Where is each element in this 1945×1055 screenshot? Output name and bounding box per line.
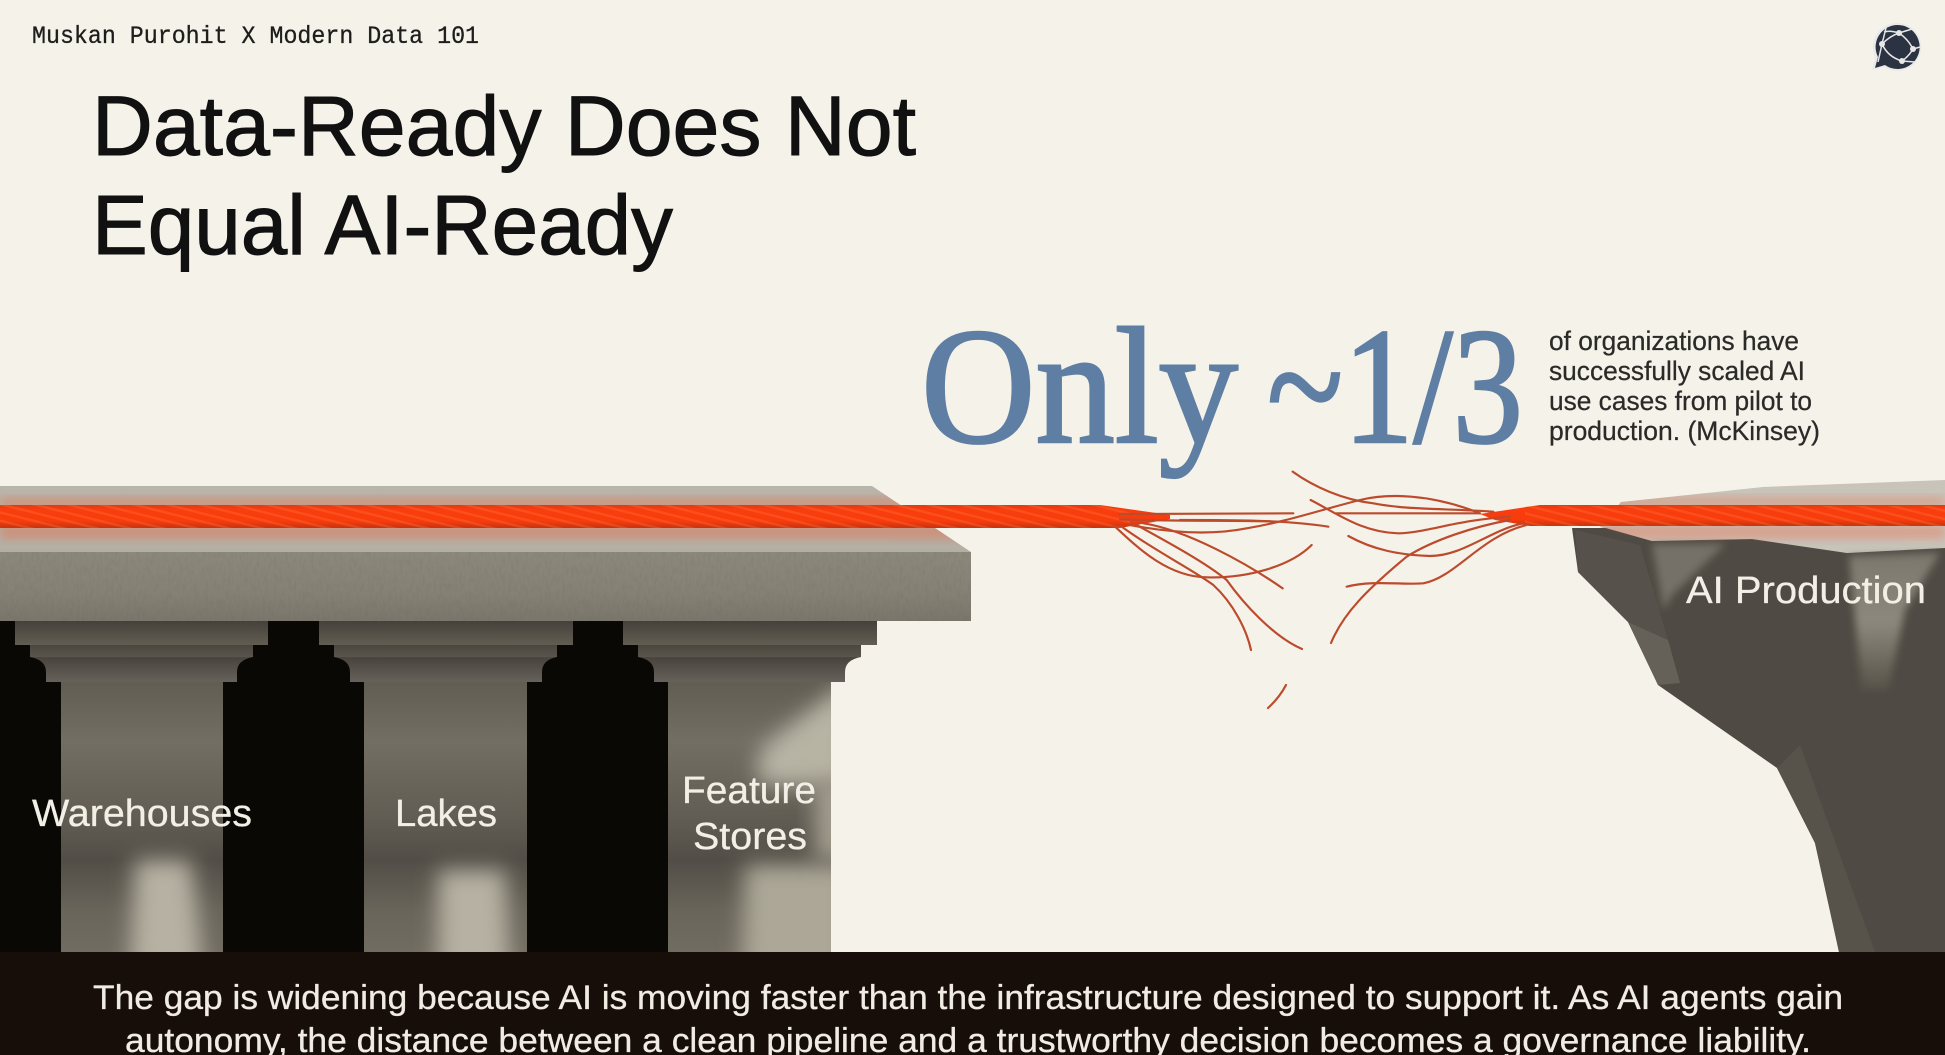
red rope right segment: [1480, 505, 1945, 526]
bottom caption band: [0, 952, 1945, 1055]
statistic description: use cases from pilot to: [1549, 386, 1812, 416]
title: [92, 79, 916, 272]
frayed rope strands: [1113, 472, 1527, 708]
pillar labels: Feature: [682, 770, 816, 812]
title: Data-Ready Does Not: [92, 79, 916, 173]
big statistic: ~1/3: [1267, 294, 1523, 478]
slab front face: [0, 552, 971, 621]
cliff body: [1572, 528, 1945, 952]
red rope left segment: [0, 505, 1170, 528]
column: warehouses: [15, 621, 268, 975]
cliff light facets: [1652, 544, 1725, 610]
pillar labels: Stores: [693, 816, 807, 858]
big statistic: [921, 294, 1523, 478]
pillar labels: Lakes: [395, 793, 497, 835]
column: lakes: [319, 621, 573, 975]
panel: pillar structure: [0, 486, 971, 980]
credit line: Muskan Purohit X Modern Data 101: [32, 22, 479, 51]
statistic description: of organizations have: [1549, 326, 1799, 356]
statistic description: production. (McKinsey): [1549, 416, 1820, 446]
statistic description: successfully scaled AI: [1549, 356, 1805, 386]
dark recess behind columns: [0, 621, 668, 952]
slab top surface: [0, 486, 971, 552]
caption text: The gap is widening because AI is moving faster than the infrastructure designed to support it. As AI agents gain: [93, 979, 1843, 1017]
title: Equal AI-Ready: [92, 178, 673, 272]
panel: cliff: [1572, 480, 1945, 952]
rope glow: [0, 498, 1945, 538]
column: feature stores: [623, 621, 877, 980]
caption text: [93, 979, 1843, 1055]
cliff label: AI Production: [1686, 570, 1926, 612]
statistic description: [1549, 326, 1820, 446]
icon: globe speech bubble logo: [1872, 23, 1921, 71]
big statistic: Only: [921, 294, 1238, 478]
cliff top surface: [1600, 480, 1945, 553]
pillar labels: [32, 770, 816, 858]
pillar labels: Warehouses: [32, 793, 252, 835]
